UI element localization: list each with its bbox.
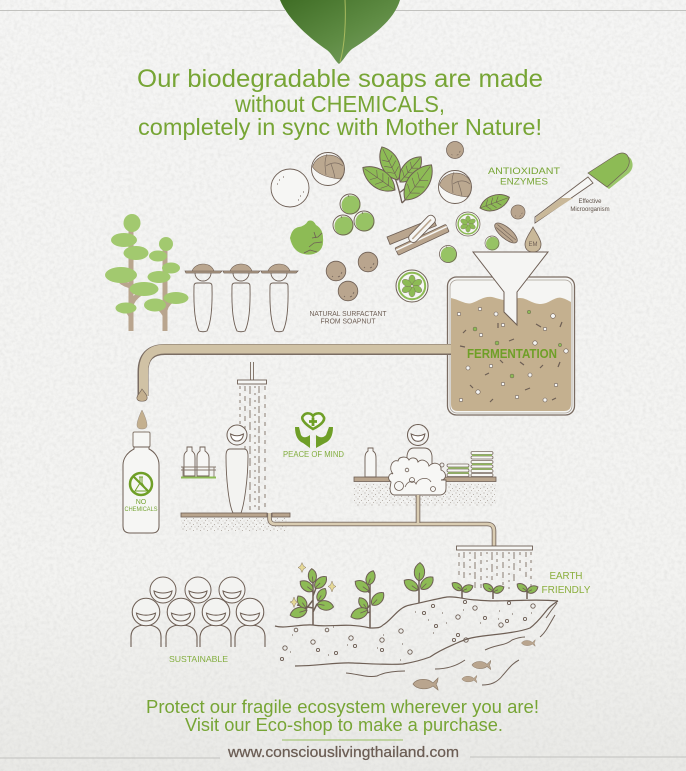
shelf with bottles [181,447,216,478]
bottle: no chemicals: CHEMICALS [124,506,158,513]
fermentation jar [448,277,574,415]
sink with person and foam [354,424,496,506]
title [137,65,543,140]
label: effective microorganism [570,199,610,213]
label: earth friendly [542,570,590,596]
label: earth friendly: FRIENDLY [542,584,590,596]
footer message: Visit our Eco-shop to make a purchase. [185,714,503,735]
label: antioxidant enzymes [488,166,560,188]
shower floor [181,513,290,532]
label: sustainable: SUSTAINABLE [169,654,228,664]
label: natural surfactant: FROM SOAPNUT [320,316,376,326]
icon: dropper [535,153,633,223]
shower with person [226,362,266,513]
workers with hats [185,264,298,332]
title: completely in sync with Mother Nature! [138,114,542,140]
icon: funnel [473,252,548,325]
title: without CHEMICALS, [234,91,445,117]
icon: EM drop: EM [528,242,538,248]
label: earth friendly: EARTH [550,570,582,582]
icon: EM drop [525,227,541,252]
crowd of happy people [131,577,265,647]
label: antioxidant enzymes: ENZYMES [500,176,548,188]
ground with soil [275,597,558,685]
ingredients: soapnuts and botanicals [271,141,525,302]
icon: peace of mind: PEACE OF MIND [283,450,344,459]
icon: peace of mind [283,413,344,459]
label: fermentation: FERMENTATION [467,346,557,361]
label: natural surfactant [310,309,387,326]
label: effective microorganism: Microorganism [570,207,610,213]
falling drop [137,410,147,429]
sprinkler over ground [456,546,532,590]
fish [413,640,535,690]
label: antioxidant enzymes: ANTIOXIDANT [488,166,560,177]
footer message: Protect our fragile ecosystem wherever you are! [146,696,539,717]
bottle: no chemicals [123,432,159,533]
icon: green leaf [280,0,400,64]
footer message [146,696,539,735]
bottle: no chemicals: NO [136,499,147,506]
plants [289,562,539,628]
drain pipes [270,495,494,546]
label: effective microorganism: Effective [579,199,602,205]
website url: www.consciouslivingthailand.com [227,744,459,761]
title: Our biodegradable soaps are made [137,65,543,93]
label: natural surfactant: NATURAL SURFACTANT [310,309,387,318]
pipe from jar to bottle [143,349,451,396]
icon: trees [105,214,188,331]
drop at pipe [137,389,147,401]
